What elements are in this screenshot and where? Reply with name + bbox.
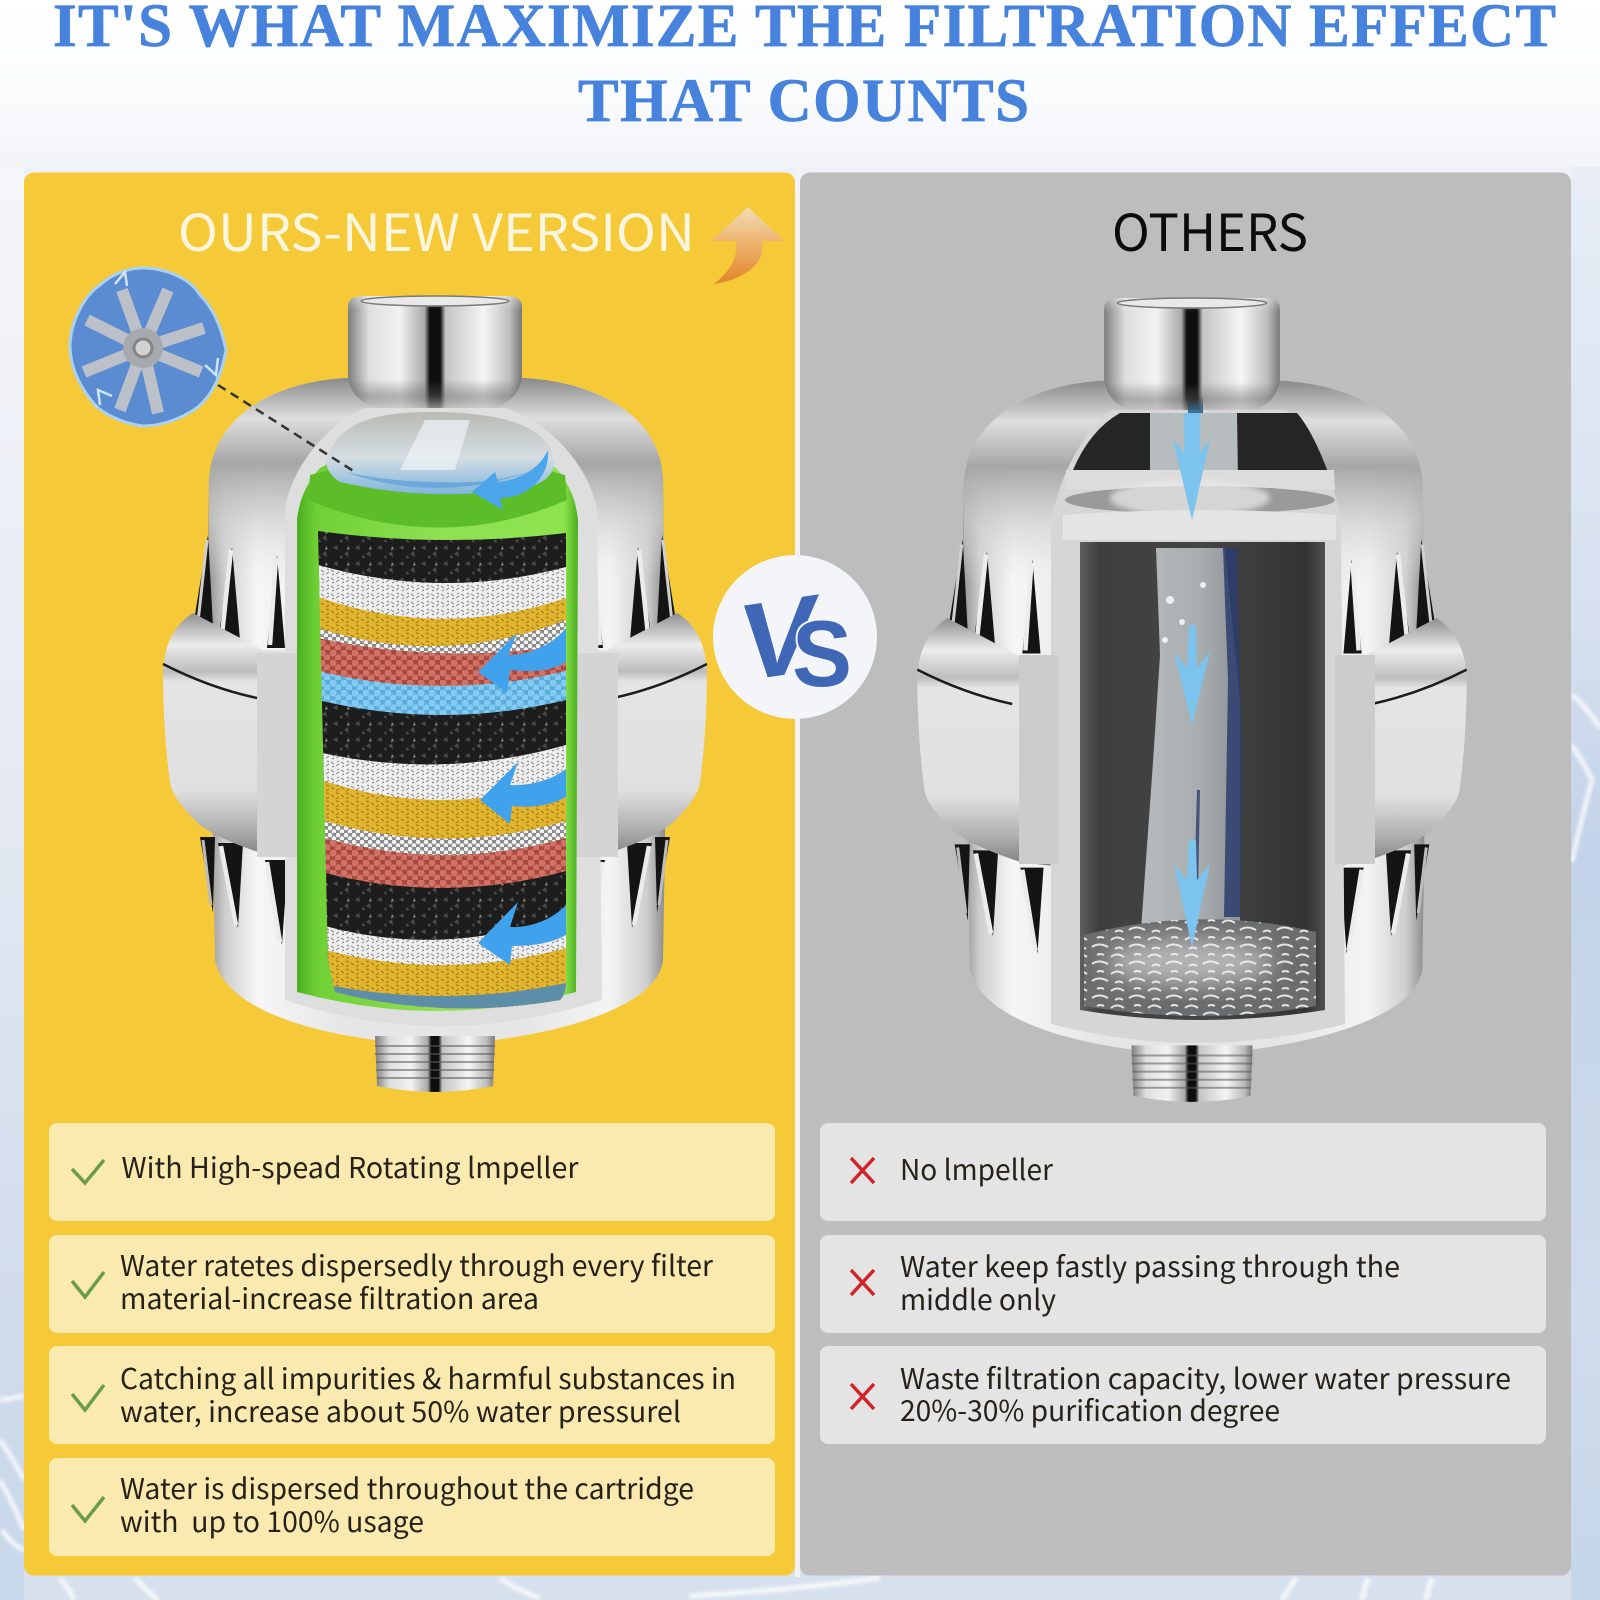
filter media layers <box>310 525 575 1020</box>
water foam <box>1084 919 1316 1016</box>
arrow: stream lower <box>1174 840 1210 947</box>
badge: VS: S <box>792 601 852 706</box>
title <box>53 0 1556 135</box>
arrow: flow top <box>472 450 548 510</box>
row: wasted capacity: 20%-30% purification degree <box>900 1389 1280 1430</box>
top chamber <box>1073 413 1328 472</box>
row: disperses through filter material: material-increase filtration area <box>120 1277 539 1318</box>
icon: upgrade arrow <box>711 207 784 284</box>
arrow: stream middle <box>1174 625 1210 725</box>
row: disperses through filter material <box>49 1235 775 1333</box>
row: full cartridge usage: Water is dispersed throughout the cartridge <box>120 1467 694 1508</box>
filter: ours cutaway <box>163 296 707 1092</box>
row: water passes through middle: middle only <box>900 1278 1056 1319</box>
row: water passes through middle: Water keep fastly passing through the <box>900 1245 1400 1286</box>
row: full cartridge usage <box>49 1458 775 1556</box>
row: high speed impeller <box>49 1123 775 1221</box>
row: no impeller: No lmpeller <box>900 1148 1054 1189</box>
arrow: flow one <box>478 628 566 693</box>
row: disperses through filter material: Water ratetes dispersedly through every filter <box>120 1244 714 1285</box>
row: high speed impeller: With High-spead Rotating lmpeller <box>122 1146 579 1187</box>
filter: others cutaway <box>917 298 1467 1102</box>
panel: others <box>800 172 1571 1576</box>
row: full cartridge usage: with up to 100% usage <box>120 1500 424 1541</box>
icon: impeller <box>70 268 226 426</box>
row: catches impurities: Catching all impurities & harmful substances in <box>120 1357 736 1398</box>
title: THAT COUNTS <box>578 68 1029 135</box>
water stream <box>1141 548 1242 930</box>
row: water passes through middle <box>820 1235 1546 1333</box>
arrow: flow two <box>480 762 566 824</box>
arrow: stream top <box>1173 413 1210 520</box>
cartridge window <box>1080 542 1325 1020</box>
panel: ours new version <box>24 172 795 1576</box>
row: wasted capacity <box>820 1346 1546 1444</box>
heading: others: OTHERS <box>1112 192 1308 266</box>
callout: impeller leader line <box>218 385 355 472</box>
badge: VS <box>713 555 877 719</box>
heading: ours new version: OURS-NEW VERSION <box>178 192 695 266</box>
row: catches impurities <box>49 1346 775 1444</box>
badge: VS: V <box>736 571 821 706</box>
row: catches impurities: water, increase about 50% water pressurel <box>120 1390 681 1431</box>
row: wasted capacity: Waste filtration capacity, lower water pressure <box>900 1357 1511 1398</box>
arrow: flow three <box>478 902 566 965</box>
row: no impeller <box>820 1123 1546 1221</box>
